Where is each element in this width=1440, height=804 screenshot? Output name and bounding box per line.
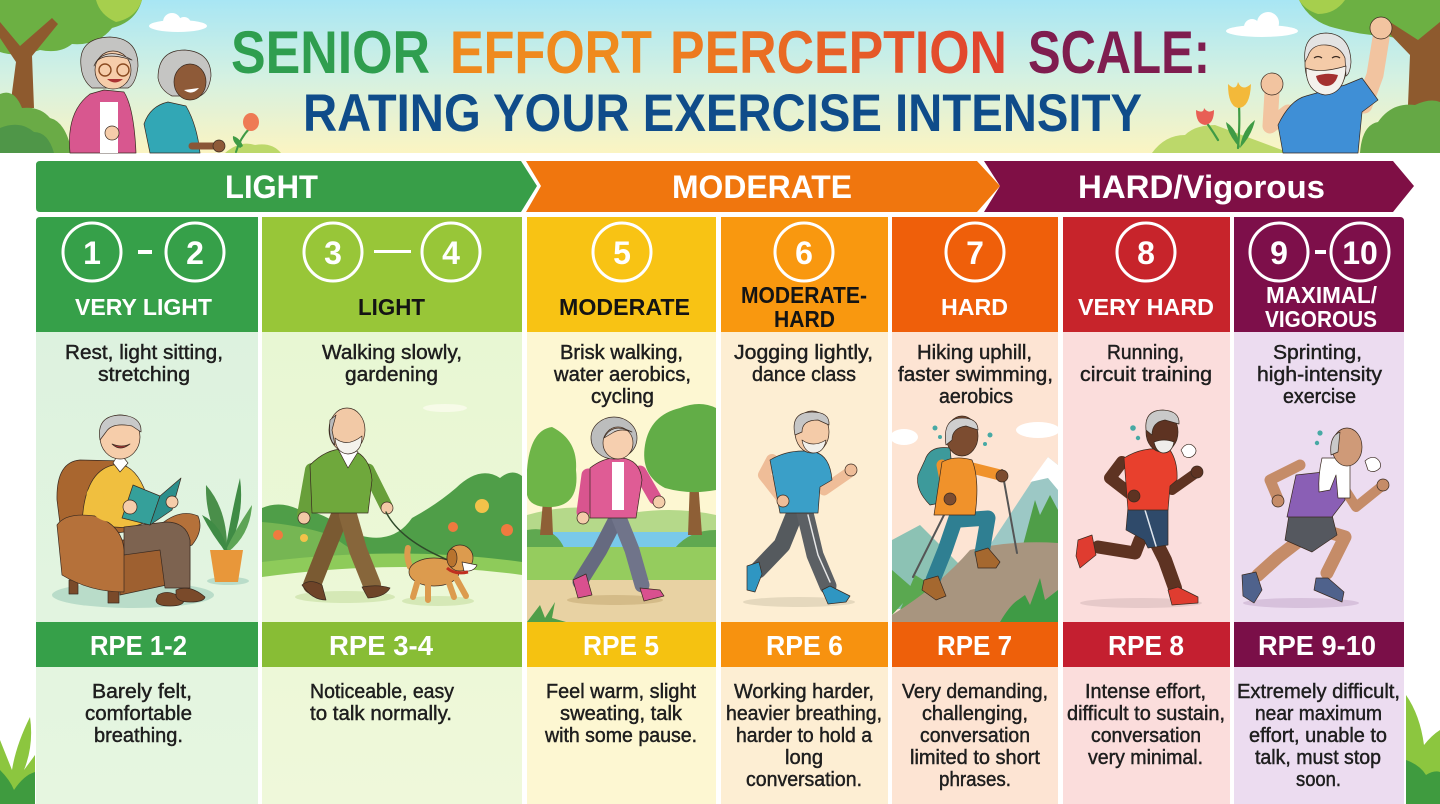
level header: VERY LIGHT [75, 294, 213, 320]
RPE bar: RPE 5 [583, 630, 659, 661]
feeling description: very minimal. [1088, 747, 1203, 769]
level header [721, 217, 888, 332]
examples [1080, 342, 1212, 386]
feeling description: Intense effort, [1085, 681, 1206, 703]
RPE bar [1063, 622, 1230, 667]
RPE bar: RPE 6 [766, 630, 843, 661]
panel: RPE 8 very hard [1063, 217, 1230, 804]
band: hard/vigorous: HARD/Vigorous [1078, 169, 1325, 205]
level header: LIGHT [358, 294, 426, 320]
level header [1063, 217, 1230, 332]
feeling description: Noticeable, easy [310, 681, 454, 703]
feeling description: heavier breathing, [726, 703, 882, 725]
bushes right [1152, 101, 1440, 153]
feeling description: effort, unable to [1249, 725, 1387, 747]
feeling description [1237, 681, 1400, 791]
examples: Walking slowly, [322, 342, 462, 364]
feeling description: challenging, [922, 703, 1028, 725]
illustration: senior reading in armchair [52, 415, 252, 608]
examples: Sprinting, [1273, 342, 1362, 364]
feeling description: harder to hold a [736, 725, 873, 747]
level header: 1 [83, 235, 101, 271]
level header: 2 [186, 235, 204, 271]
examples [65, 342, 223, 386]
title: EFFORT [450, 19, 652, 86]
illustration: woman brisk walking by lake [527, 404, 716, 622]
examples [898, 342, 1053, 408]
illustration: hiker on mountain trail [890, 416, 1060, 622]
examples: Rest, light sitting, [65, 342, 223, 364]
level header: VERY HARD [1078, 294, 1214, 320]
bush small left [225, 144, 281, 153]
RPE bar: RPE 9-10 [1258, 630, 1376, 661]
band: light: LIGHT [225, 169, 318, 205]
RPE bar: RPE 3-4 [329, 630, 434, 661]
cloud left [149, 13, 207, 32]
examples: Brisk walking, [560, 342, 683, 364]
level header: 10 [1342, 235, 1378, 271]
bush left [0, 93, 72, 153]
illustration: man sprinting with towel [1242, 428, 1389, 608]
feeling description: Very demanding, [902, 681, 1048, 703]
feeling description [310, 681, 454, 725]
examples: stretching [98, 364, 190, 386]
RPE bar [36, 622, 258, 667]
examples: high-intensity [1257, 364, 1382, 386]
examples: gardening [345, 364, 438, 386]
level header [1234, 217, 1404, 332]
examples: faster swimming, [898, 364, 1053, 386]
feeling description [726, 681, 882, 791]
header banner [0, 0, 1440, 153]
level header: 8 [1137, 235, 1155, 271]
panel: RPE 1-2 very light [36, 217, 258, 804]
feeling description [85, 681, 192, 747]
RPE bar: RPE 7 [937, 630, 1012, 661]
level header: 3 [324, 235, 342, 271]
level header [527, 217, 716, 332]
feeling description: sweating, talk [560, 703, 683, 725]
panel: RPE 7 hard [890, 217, 1060, 804]
illustration: senior walking dog [262, 404, 522, 606]
woman in teal [144, 50, 225, 153]
RPE bar [262, 622, 522, 667]
feeling description: difficult to sustain, [1067, 703, 1225, 725]
examples: Hiking uphill, [917, 342, 1032, 364]
feeling description: conversation [1091, 725, 1201, 747]
examples: Jogging lightly, [734, 342, 873, 364]
band: moderate: MODERATE [672, 169, 852, 205]
title: PERCEPTION [670, 19, 1007, 86]
examples [734, 342, 873, 386]
level header [892, 217, 1058, 332]
level header: 5 [613, 235, 631, 271]
woman in pink [69, 37, 138, 153]
title [231, 19, 1210, 143]
RPE bar [892, 622, 1058, 667]
feeling description: comfortable [85, 703, 192, 725]
feeling description: phrases. [939, 769, 1011, 791]
examples: cycling [591, 386, 654, 408]
level header [36, 217, 258, 332]
RPE bar [721, 622, 888, 667]
band: light [36, 161, 537, 212]
examples: water aerobics, [553, 364, 691, 386]
level header: MODERATE- [741, 282, 867, 308]
flowers right [1196, 82, 1255, 148]
band: moderate [526, 161, 1000, 212]
examples: aerobics [939, 386, 1013, 408]
tree left [0, 0, 142, 108]
feeling description: limited to short [910, 747, 1040, 769]
panel: RPE 6 moderate-hard [721, 217, 888, 804]
examples [322, 342, 462, 386]
level header: MODERATE [559, 294, 690, 320]
illustration: man running hard [1076, 410, 1203, 608]
feeling description: breathing. [94, 725, 183, 747]
feeling description: Extremely difficult, [1237, 681, 1400, 703]
panel: RPE 3-4 light [262, 217, 522, 804]
examples: Running, [1107, 342, 1184, 364]
title: RATING YOUR EXERCISE INTENSITY [303, 84, 1142, 143]
level header: VIGOROUS [1265, 306, 1377, 332]
examples: exercise [1283, 386, 1356, 408]
tree right [1299, 0, 1440, 105]
title: SCALE: [1028, 19, 1210, 86]
feeling description: talk, must stop [1255, 747, 1381, 769]
RPE bar [1234, 622, 1404, 667]
feeling description: Feel warm, slight [546, 681, 696, 703]
RPE bar: RPE 8 [1108, 630, 1184, 661]
decorative leaves bottom right [1406, 695, 1440, 804]
panel: RPE 5 moderate [527, 217, 716, 804]
examples: dance class [752, 364, 856, 386]
feeling description: near maximum [1255, 703, 1382, 725]
level header [262, 217, 522, 332]
examples: circuit training [1080, 364, 1212, 386]
cloud right [1226, 12, 1298, 37]
level header: MAXIMAL/ [1266, 282, 1377, 308]
flower left [233, 113, 259, 152]
feeling description: to talk normally. [310, 703, 452, 725]
feeling description [902, 681, 1048, 791]
feeling description [544, 681, 697, 747]
feeling description: conversation. [746, 769, 862, 791]
feeling description [1067, 681, 1225, 769]
level header: 9 [1270, 235, 1288, 271]
illustration: man jogging [743, 411, 857, 607]
level header: 7 [966, 235, 984, 271]
level header: HARD [941, 294, 1008, 320]
band: hard/vigorous [984, 161, 1414, 212]
RPE bar: RPE 1-2 [90, 630, 187, 661]
level header: HARD [774, 306, 835, 332]
examples [1257, 342, 1382, 408]
level header: 6 [795, 235, 813, 271]
RPE bar [527, 622, 716, 667]
feeling description: Working harder, [734, 681, 874, 703]
title: SENIOR [231, 19, 430, 86]
cheering man [1261, 17, 1392, 153]
feeling description: Barely felt, [92, 681, 192, 703]
examples [553, 342, 691, 408]
feeling description: conversation [920, 725, 1030, 747]
feeling description: soon. [1296, 769, 1341, 791]
feeling description: with some pause. [544, 725, 697, 747]
plant [202, 478, 252, 585]
level header: 4 [442, 235, 460, 271]
feeling description: long [785, 747, 823, 769]
panel: RPE 9-10 maximal [1234, 217, 1404, 804]
decorative leaves bottom left [0, 717, 35, 804]
